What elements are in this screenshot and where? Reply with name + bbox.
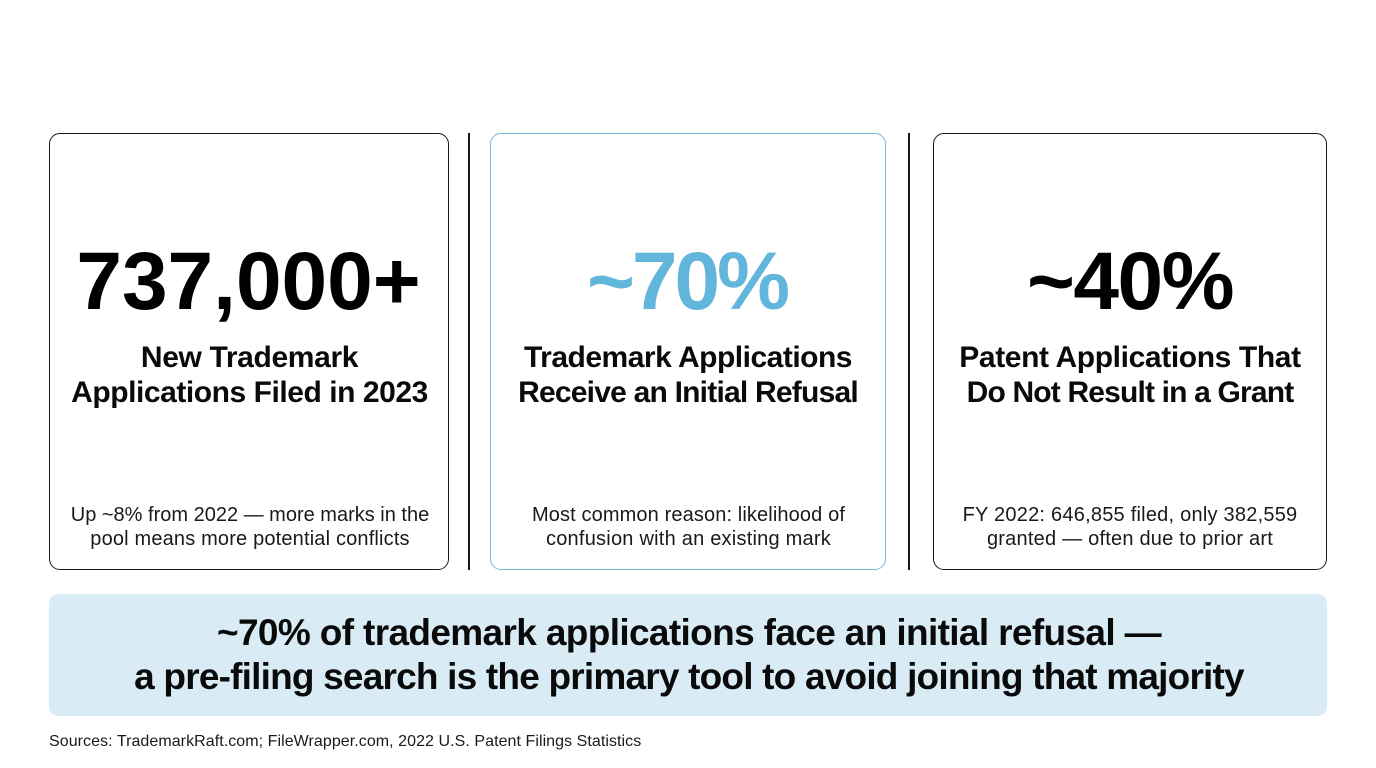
callout text: ~70% of trademark applications face an initial refusal —: [217, 612, 1161, 653]
heading: new trademark applications: [71, 341, 428, 409]
heading: new trademark applications: Applications Filed in 2023: [71, 376, 428, 409]
panel: new trademark applications: [49, 133, 449, 570]
heading: initial refusal: Trademark Applications: [524, 341, 852, 374]
stat: 737,000+: 737,000+: [76, 236, 421, 327]
text: patent note: [963, 504, 1297, 550]
text: refusal note: Most common reason: likelihood of: [532, 504, 845, 526]
panel: patent applications: [933, 133, 1327, 570]
callout text: a pre-filing search is the primary tool to avoid joining that majority: [134, 656, 1244, 697]
text: refusal note: [532, 504, 845, 550]
heading: new trademark applications: New Trademark: [141, 341, 358, 374]
text: refusal note: confusion with an existing mark: [546, 528, 831, 550]
stat: ~40%: ~40%: [1027, 236, 1233, 327]
heading: initial refusal: Receive an Initial Refusal: [518, 376, 858, 409]
text: trademark note: pool means more potential conflicts: [90, 528, 410, 550]
text: patent note: FY 2022: 646,855 filed, only 382,559: [963, 504, 1297, 526]
heading: patent applications: [959, 341, 1301, 409]
text: trademark note: Up ~8% from 2022 — more marks in the: [71, 504, 429, 526]
heading: patent applications: Do Not Result in a Grant: [967, 376, 1293, 409]
text: patent note: granted — often due to prior art: [987, 528, 1273, 550]
stat: ~70%: ~70%: [587, 236, 787, 327]
callout: takeaway banner: [49, 594, 1327, 716]
heading: initial refusal: [518, 341, 858, 409]
callout text: [134, 612, 1244, 697]
heading: patent applications: Patent Applications That: [959, 341, 1301, 374]
panel: initial refusal: [490, 133, 886, 570]
text: trademark note: [71, 504, 429, 550]
sources: Sources: TrademarkRaft.com; FileWrapper.com, 2022 U.S. Patent Filings Statistics: [49, 733, 641, 750]
